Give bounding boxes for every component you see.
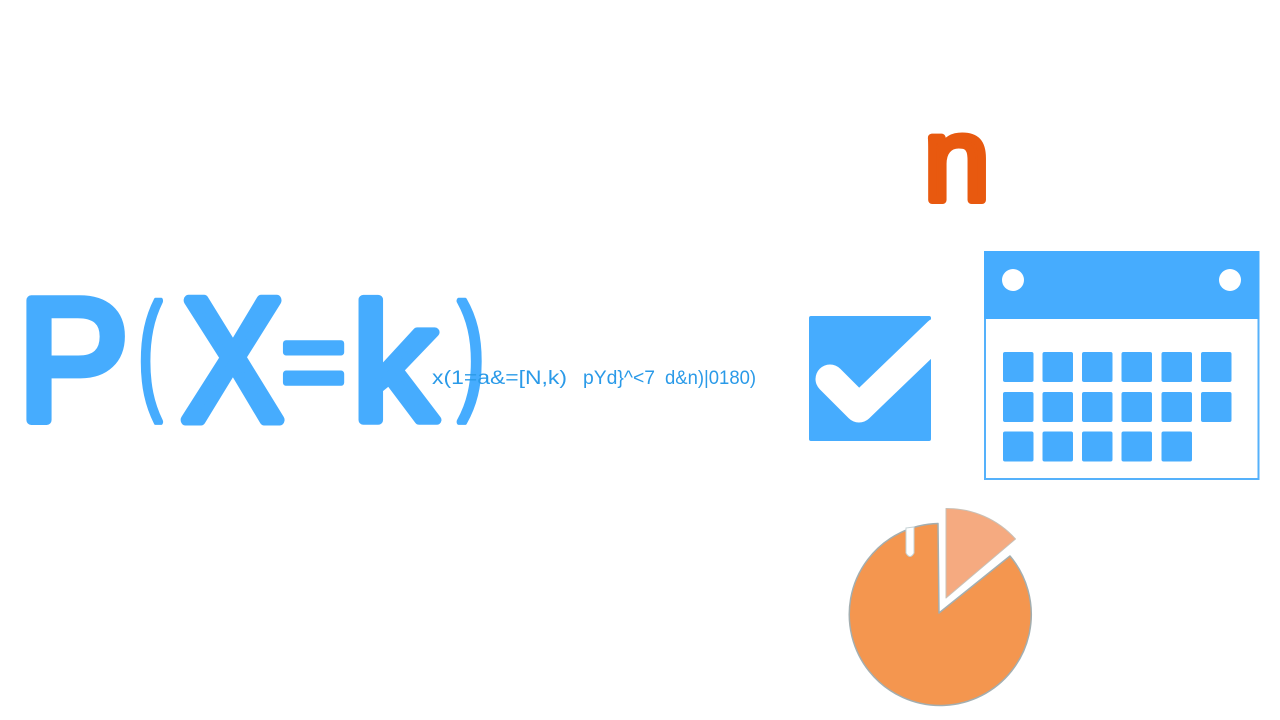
formula heading: P(X=k): = [280, 294, 347, 429]
letter n: n [924, 94, 990, 226]
calendar header [984, 251, 1260, 319]
formula heading: P(X=k): k [352, 270, 437, 456]
formula heading: P(X=k): P [18, 264, 129, 458]
formula heading: P(X=k): ( [138, 279, 162, 424]
small formula text: d&n)|0180) [665, 368, 756, 389]
icon: checkbox [809, 316, 938, 441]
small formula text: pYd}^<7 [583, 368, 655, 389]
small pie slice [946, 508, 1016, 598]
large pie segment [849, 524, 1031, 705]
formula heading: P(X=k): ) [458, 277, 485, 423]
small formula text [432, 368, 756, 389]
calendar day grid [1003, 352, 1232, 462]
pie chart [849, 508, 1031, 705]
formula heading: P(X=k): X [182, 262, 283, 457]
icon: calendar [984, 251, 1260, 479]
formula heading: P(X=k) [18, 262, 485, 458]
small formula text: x(1=a&=[N,k) [432, 368, 567, 389]
pie notch [906, 527, 914, 556]
